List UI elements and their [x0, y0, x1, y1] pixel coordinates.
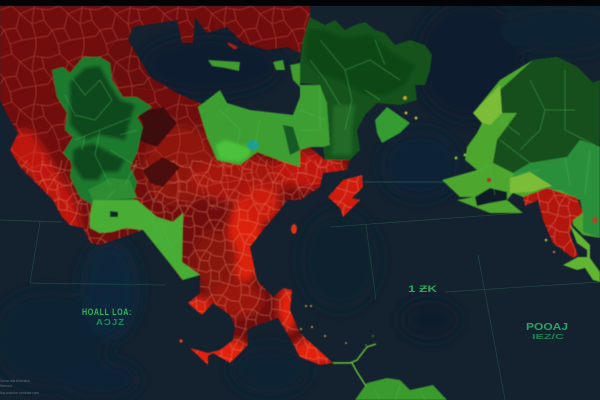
region: left green territory [52, 57, 152, 205]
region: green transition [88, 178, 137, 200]
route: green connecting strip [333, 344, 376, 386]
region: brightest green patch [215, 140, 250, 162]
region: red island [328, 174, 364, 218]
label: east ocean [526, 322, 568, 341]
region: green peninsula island [375, 107, 410, 143]
top black bar [0, 0, 600, 6]
region: eastern mid green [513, 140, 600, 238]
green region borders [65, 40, 595, 400]
shading: brighter red zones [5, 30, 345, 368]
region: left green dark interior [70, 66, 135, 180]
region: darker interior of north land [305, 30, 415, 95]
region: mid green eastern shore [332, 105, 355, 155]
source note: Reference [0, 384, 12, 388]
region: southern green land [355, 378, 447, 400]
region: dark maroon patch north [137, 107, 177, 147]
latitude and longitude grid [0, 182, 600, 400]
region: eastern southern tip [563, 225, 600, 282]
region: dark maroon patch south [143, 157, 180, 187]
source note: Source data information [0, 379, 30, 383]
region: lower bright green strip [90, 200, 200, 280]
texture: fine province cells [18, 159, 346, 365]
label: west ocean: HOALL LOA: [82, 307, 132, 317]
region: dark patch in green land [283, 125, 300, 155]
scattered islands [179, 96, 598, 346]
label: west ocean [82, 307, 132, 327]
region: eastern land base [442, 57, 600, 238]
region: eastern red peninsula [520, 185, 585, 260]
region: central bright green land [198, 85, 330, 167]
texture: province cells [0, 0, 360, 210]
region: north dark green land [300, 17, 432, 160]
source note [0, 379, 39, 395]
label: east ocean: IEZ/C [532, 334, 564, 341]
region: eastern dark inlet [475, 188, 507, 206]
icon: blue lake [247, 140, 259, 150]
source note: Map projection coordinate notes [0, 391, 39, 395]
region: small red bay island [228, 42, 238, 50]
label: west ocean: AƆJZ [96, 318, 125, 327]
label: central ocean: 1 ƵK [408, 284, 437, 295]
region: eastern dark green interior [493, 57, 600, 173]
region: green land pocket [110, 211, 118, 217]
region: red land [0, 0, 360, 380]
region: eastern pale green coast [473, 85, 552, 193]
region: green bay islands [208, 60, 300, 87]
label: east ocean: POOAJ [526, 322, 568, 333]
